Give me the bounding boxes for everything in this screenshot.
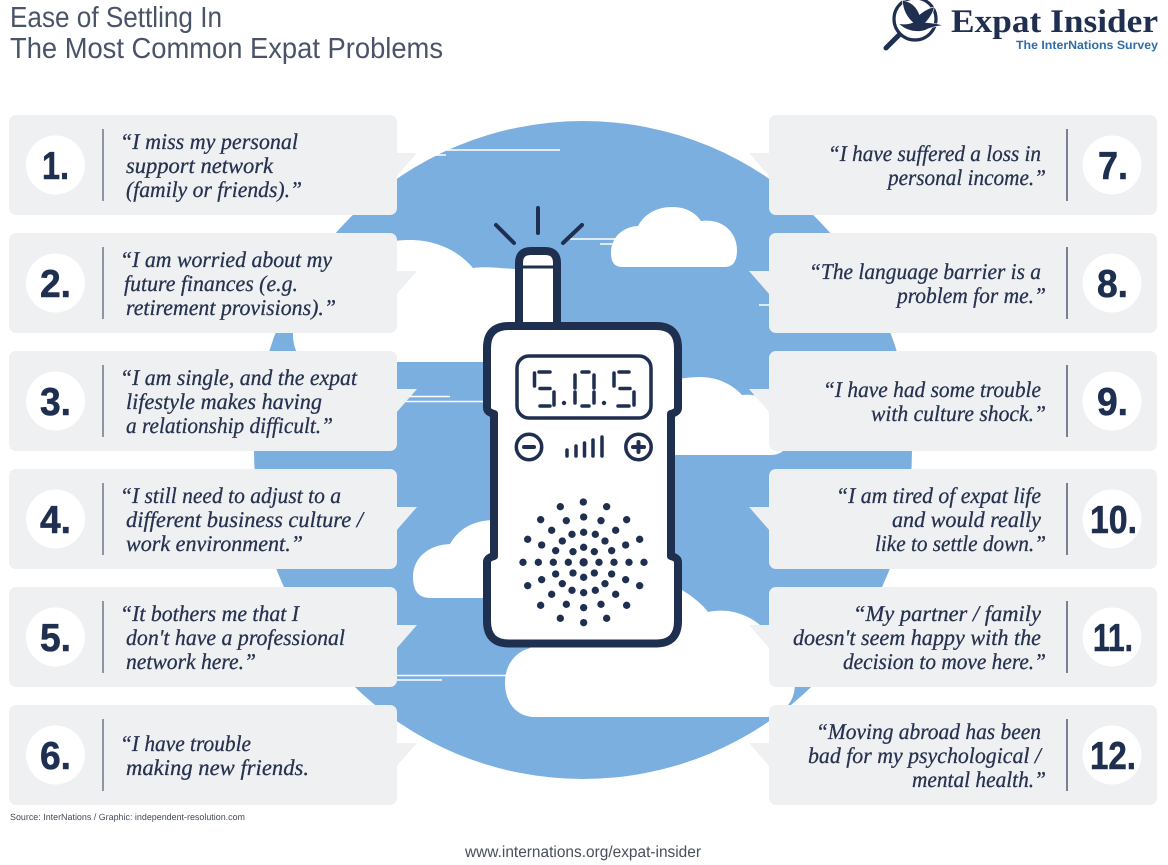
panel: problem 1: support network <box>126 153 274 178</box>
wind lines <box>397 150 769 680</box>
panel: problem 11 <box>749 587 1157 687</box>
panel: problem 4: “I still need to adjust to a <box>120 483 341 508</box>
icon: signal bars <box>567 437 602 456</box>
panel: problem 12: “Moving abroad has been <box>816 719 1041 744</box>
panel: problem 3: 3. <box>40 381 71 424</box>
panel: problem 2: “I am worried about my <box>120 247 332 272</box>
panel: problem 12: 12. <box>1090 735 1136 778</box>
radio body <box>487 326 678 644</box>
panel: problem 4: 4. <box>40 499 71 542</box>
panel: problem 12: bad for my psychological / <box>808 743 1043 768</box>
panel: problem 6: 6. <box>40 735 71 778</box>
logo: Expat Insider <box>886 0 1158 52</box>
panel: problem 10 <box>749 469 1157 569</box>
icon: plus button <box>626 434 651 460</box>
panel: problem 2: future finances (e.g. <box>124 271 298 296</box>
panel: problem 6 <box>9 705 417 805</box>
panel: problem 5 <box>9 587 417 687</box>
panel: problem 2: retirement provisions).” <box>126 295 336 320</box>
panel: problem 11: decision to move here.” <box>843 649 1046 674</box>
panel: problem 8: 8. <box>1097 263 1128 306</box>
cloud: bottom <box>505 590 795 717</box>
panel: problem 4: work environment.” <box>126 531 303 556</box>
panel: problem 5: 5. <box>40 617 71 660</box>
panel: problem 3: a relationship difficult.” <box>126 413 333 438</box>
cloud: upper right <box>611 207 737 267</box>
panel: problem 8: “The language barrier is a <box>809 259 1041 284</box>
panel: problem 11: “My partner / family <box>853 601 1041 626</box>
speaker grille <box>519 498 648 626</box>
panel: problem 1 <box>9 115 417 215</box>
source note: Source: InterNations / Graphic: independent-resolution.com <box>10 812 245 822</box>
panel: problem 6: “I have trouble <box>120 731 251 756</box>
footer url: www.internations.org/expat-insider <box>464 844 702 861</box>
panel: problem 1: “I miss my personal <box>120 129 298 154</box>
panel: problem 7: “I have suffered a loss in <box>828 141 1041 166</box>
title: The Most Common Expat Problems <box>10 33 443 65</box>
logo: Expat Insider: The InterNations Survey <box>1016 38 1158 52</box>
panel: problem 12 <box>749 705 1157 805</box>
panel: problem 9: with culture shock.” <box>871 401 1046 426</box>
background: blue sky circle with clouds <box>254 121 912 779</box>
panel: problem 10: like to settle down.” <box>875 531 1046 556</box>
panel: problem 5: network here.” <box>126 649 256 674</box>
panel: problem 2: 2. <box>40 263 71 306</box>
icon: minus button <box>516 434 542 460</box>
panel: problem 9 <box>749 351 1157 451</box>
cloud: middle right <box>660 377 788 455</box>
panel: problem 7 <box>749 115 1157 215</box>
title: Ease of Settling In <box>10 2 222 34</box>
panel: problem 4 <box>9 469 417 569</box>
panel: problem 6: making new friends. <box>126 755 309 780</box>
panel: problem 7: 7. <box>1098 145 1128 188</box>
panel: problem 1: (family or friends).” <box>126 177 302 202</box>
panel: problem 7: personal income.” <box>886 165 1046 190</box>
panel: problem 10: and would really <box>892 507 1041 532</box>
cloud: upper left <box>293 240 530 362</box>
icon: magnifier with bird <box>886 0 942 48</box>
cloud: lower left <box>413 520 495 598</box>
panel: problem 3: “I am single, and the expat <box>120 365 358 390</box>
panel: problem 1: 1. <box>42 145 69 188</box>
panel: problem 10: 10. <box>1090 499 1137 542</box>
antenna <box>519 251 557 326</box>
panel: problem 11: 11. <box>1093 617 1133 660</box>
panel: problem 5: don't have a professional <box>126 625 345 650</box>
panel: problem 10: “I am tired of expat life <box>836 483 1041 508</box>
logo: Expat Insider: Expat Insider <box>951 4 1158 40</box>
panel: problem 4: different business culture / <box>126 507 365 532</box>
panel: problem 5: “It bothers me that I <box>120 601 300 626</box>
panel: problem 3 <box>9 351 417 451</box>
panel: problem 3: lifestyle makes having <box>126 389 322 414</box>
panel: problem 9: 9. <box>1097 381 1128 424</box>
display: S.O.S <box>517 356 651 418</box>
icon: signal rays <box>496 208 582 243</box>
panel: problem 9: “I have had some trouble <box>823 377 1041 402</box>
walkie-talkie radio <box>487 208 678 644</box>
panel: problem 12: mental health.” <box>912 767 1046 792</box>
title <box>10 2 443 65</box>
panel: problem 11: doesn't seem happy with the <box>793 625 1041 650</box>
panel: problem 8: problem for me.” <box>895 283 1046 308</box>
panel: problem 2 <box>9 233 417 333</box>
panel: problem 8 <box>749 233 1157 333</box>
